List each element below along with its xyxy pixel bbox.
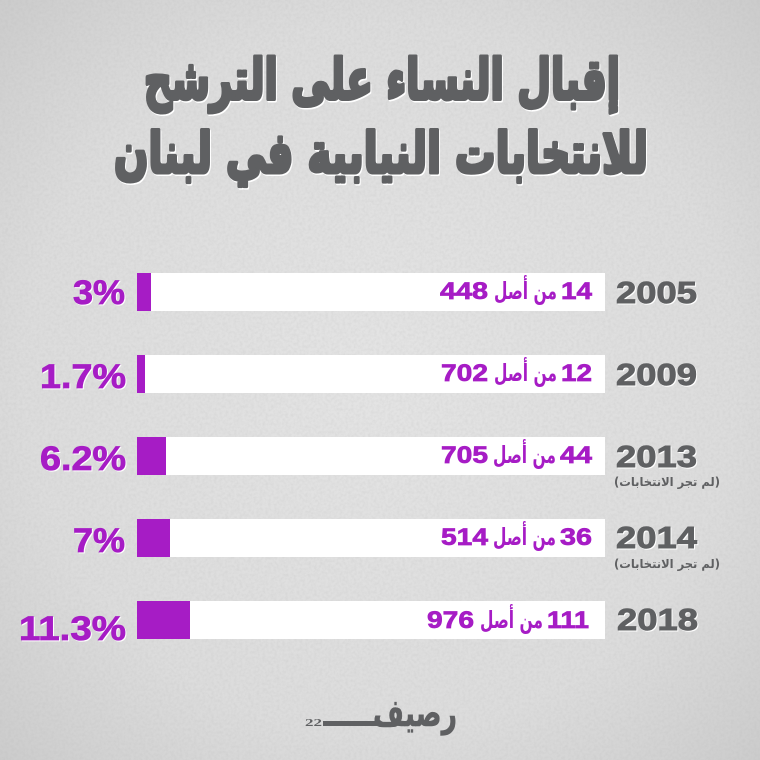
row: 2014: 7% [74, 523, 126, 561]
row: 2009: 1.7% [40, 358, 126, 396]
row: 2018: 11.3% [20, 611, 127, 649]
row: 2014: من أصل [493, 521, 556, 551]
row: 2005: 448 [440, 278, 488, 305]
row: 2014: (لم تجر الانتخابات) [614, 557, 720, 571]
title [114, 48, 649, 188]
row: 2014: 2014 [617, 521, 699, 556]
row: 2018: 2018 [618, 603, 699, 638]
row: 2013 [40, 437, 720, 489]
row: 2009: 2009 [617, 358, 698, 393]
row: 2005: من أصل [494, 275, 557, 305]
row: 2005: 2005 [616, 275, 697, 310]
row: 2009: 1.7% [41, 359, 127, 397]
row: 2005 [73, 273, 698, 313]
row: 2018: 2018 [617, 602, 698, 637]
row: 2018: 11.3% [19, 610, 126, 648]
row: 2014: 36 [560, 524, 592, 551]
row: 2009: 702 [441, 360, 488, 387]
row: 2013: 6.2% [40, 440, 126, 478]
row: 2018: 111 [547, 607, 589, 634]
row: 2013: 6.2% [41, 441, 127, 479]
row: 2013: 2013 [616, 439, 697, 474]
row: 2013: 44 [560, 442, 593, 469]
row: 2014: 514 [441, 524, 489, 551]
row: 2014: 7% [73, 522, 125, 560]
row: 2005: 3% [73, 274, 125, 312]
row: 2014 [73, 519, 720, 571]
row: 2009: 2009 [616, 357, 697, 392]
row: 2013: 705 [441, 442, 488, 469]
row: 2013: (لم تجر الانتخابات) [614, 475, 720, 489]
row: 2018: من أصل [480, 604, 543, 634]
row: 2018 [19, 601, 699, 649]
row: 2009: من أصل [494, 357, 557, 387]
row: 2005: 14 [561, 278, 593, 305]
row: 2018: 976 [427, 607, 474, 634]
logo: Raseef22: رصيف [373, 691, 457, 735]
row: 2014: 2014 [616, 520, 698, 555]
logo: Raseef22: 22 [305, 718, 322, 729]
row: 2009: 12 [561, 360, 592, 387]
logo: Raseef22 [305, 691, 457, 735]
row: 2013: من أصل [493, 439, 556, 469]
row: 2005: 2005 [617, 276, 698, 311]
row: 2009 [40, 355, 698, 397]
row: 2005: 3% [74, 275, 126, 313]
row: 2013: 2013 [617, 440, 698, 475]
